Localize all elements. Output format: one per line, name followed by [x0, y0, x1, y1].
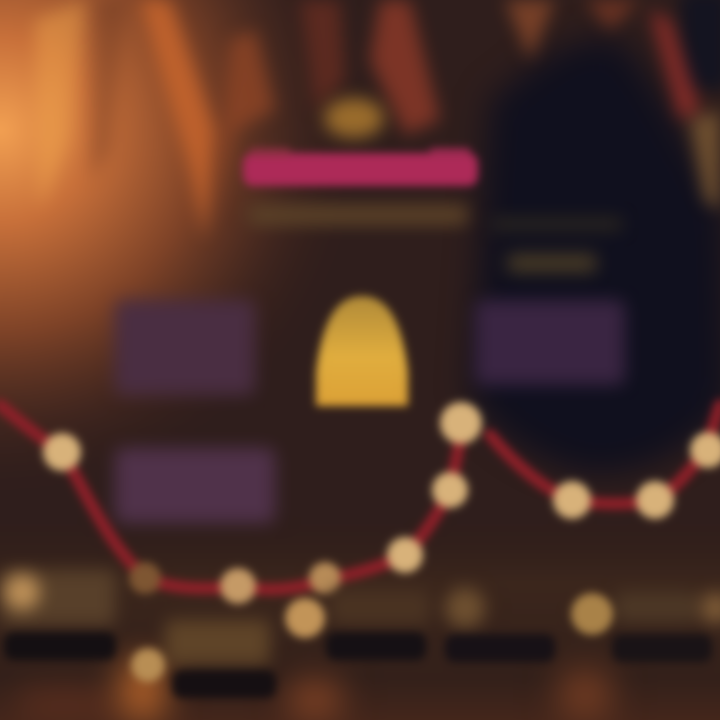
bottom card two — [131, 620, 276, 698]
golden top ornament — [324, 98, 384, 138]
dark navy panel on the right — [470, 38, 720, 474]
panel: lower left purple text block — [115, 448, 275, 523]
top curtain drips — [35, 0, 720, 240]
bottom card three — [285, 590, 430, 660]
icon: golden padlock — [316, 296, 408, 406]
bottom card four — [445, 588, 555, 662]
subtitle — [248, 205, 468, 225]
bottom glow on floor — [20, 660, 610, 720]
string of lights: red cord — [0, 405, 720, 589]
panel: upper left purple text block — [115, 300, 255, 395]
panel: right purple text block — [475, 300, 625, 385]
title — [243, 148, 478, 186]
dark upper right corner — [680, 0, 720, 90]
bottom card five — [571, 592, 720, 662]
string of lights: bulbs — [43, 402, 720, 604]
right heading — [492, 218, 622, 272]
bottom card one — [0, 570, 116, 660]
